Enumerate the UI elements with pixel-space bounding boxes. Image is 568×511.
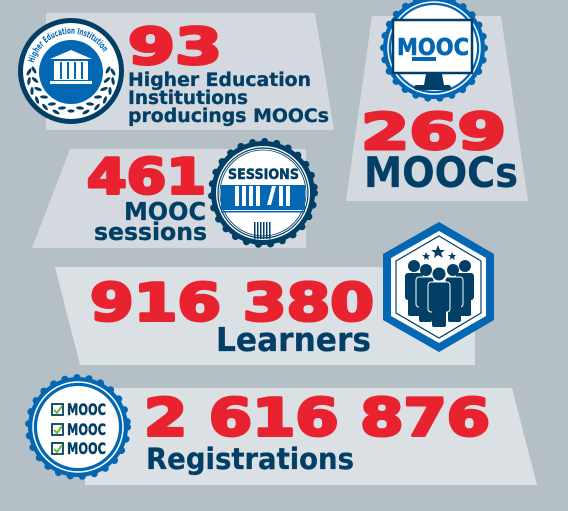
- number: 93: 93: [128, 18, 222, 76]
- number: 2 616 876: 2 616 876: [144, 388, 490, 448]
- number: 916 380: 916 380: [90, 274, 374, 334]
- panel: registrations: [85, 388, 537, 485]
- label: Higher Education Institutions producings MOOCs: Higher Education: [128, 70, 311, 91]
- panel: learners: [55, 267, 475, 365]
- icon: institution badge: Higher Education Institution: [28, 27, 108, 62]
- icon: learners hexagon: [383, 222, 494, 352]
- icon: sessions badge: [211, 141, 315, 245]
- label: Learners: Learners: [216, 320, 371, 359]
- icon: sessions badge: SESSIONS: [228, 167, 299, 183]
- icon: registrations badge: MOOC: [67, 420, 106, 439]
- icon: MOOC monitor badge: [383, 0, 485, 99]
- label: MOOC sessions: MOOC: [124, 197, 206, 226]
- label: MOOC sessions: [94, 197, 207, 246]
- label: Higher Education Institutions producings MOOCs: Institutions: [128, 88, 248, 109]
- panel: higher education institutions: [46, 13, 334, 130]
- icon: registrations badge: MOOC: [67, 400, 106, 419]
- label: Registrations: Registrations: [146, 442, 354, 476]
- icon: MOOC monitor badge: MOOC: [397, 35, 469, 61]
- number: 461: 461: [87, 148, 206, 206]
- label: MOOC sessions: sessions: [94, 218, 207, 246]
- icon: registrations badge: MOOC: [67, 439, 106, 458]
- number: 269: 269: [361, 103, 506, 161]
- icon: registrations badge: [28, 377, 128, 477]
- panel: MOOC sessions: [32, 149, 306, 248]
- icon: institution badge: [18, 18, 124, 124]
- label: MOOCs: MOOCs: [364, 148, 518, 197]
- label: Higher Education Institutions producings MOOCs: [128, 70, 329, 127]
- label: Higher Education Institutions producings MOOCs: producings MOOCs: [128, 106, 329, 127]
- panel: MOOCs: [346, 16, 528, 201]
